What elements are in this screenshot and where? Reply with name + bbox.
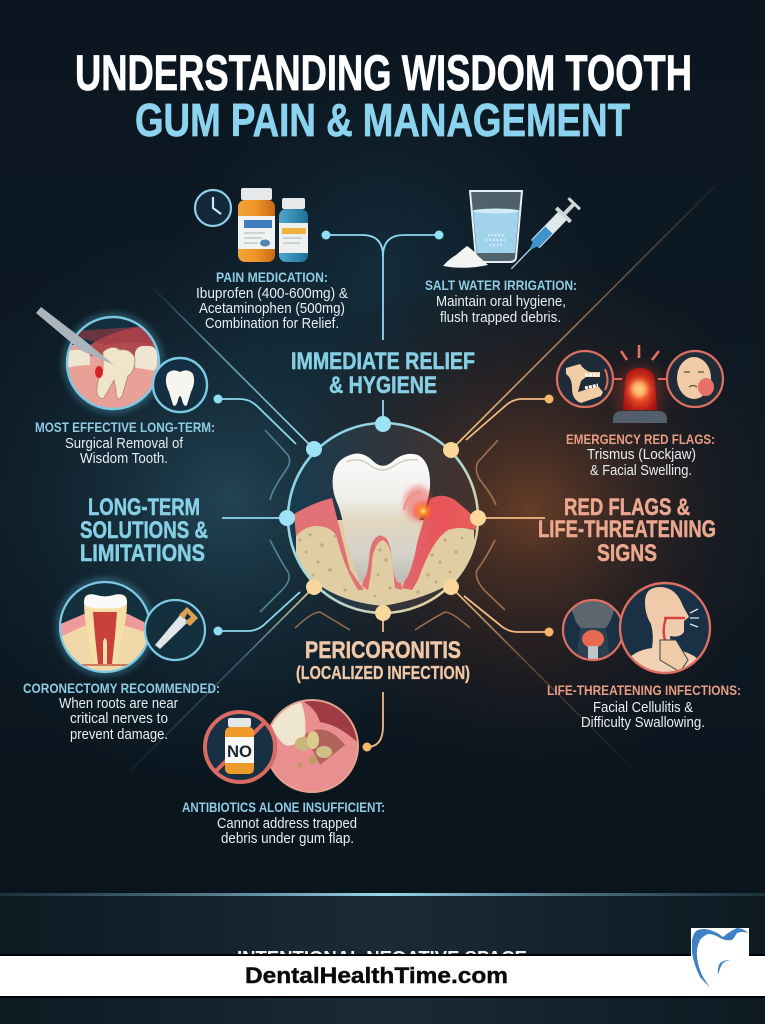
text: pain medication: PAIN MEDICATION: [216,269,328,285]
text: salt water irrigation: flush trapped debris. [440,309,561,326]
tooth [333,453,430,583]
text: coronectomy: prevent damage. [70,726,168,743]
icon: no antibiotics: NO [227,742,252,761]
text: antibiotics: debris under gum flap. [221,830,354,847]
text: coronectomy: CORONECTOMY RECOMMENDED: [23,680,220,696]
title: GUM PAIN & MANAGEMENT [135,94,630,146]
heading: pericoronitis [296,637,470,683]
icon: gum flap debris [266,698,360,792]
text: most effective [35,419,215,467]
connector: long-term middle [222,517,287,519]
connector: red flags lower [464,596,554,636]
heading: pericoronitis: (LOCALIZED INFECTION) [296,663,470,683]
text: coronectomy: When roots are near [59,695,178,712]
connector: immediate relief branches [322,230,444,424]
icon: salt water glass [470,191,522,262]
text: emergency red flags [566,431,715,479]
heading: pericoronitis: PERICORONITIS [305,637,461,664]
heading: long-term solutions: LONG-TERM [88,494,200,521]
clipped footer text: INTENTIONAL NEGATIVE SPACE [237,948,527,968]
title [75,45,692,146]
text: life-threatening infections: Facial Cellulitis & [593,699,693,716]
icon: no antibiotics [203,710,277,784]
connector: red flags middle [478,517,545,519]
website banner [0,954,765,998]
text: most effective: MOST EFFECTIVE LONG-TERM: [35,419,215,435]
icon: logo [691,928,749,987]
heading: long-term solutions [80,494,208,567]
icon: syringe [504,196,582,276]
text: antibiotics: ANTIBIOTICS ALONE INSUFFICIENT: [182,799,385,815]
icon: white tooth circle [153,358,207,412]
text: emergency red flags: EMERGENCY RED FLAGS: [566,431,715,447]
text: salt water irrigation: SALT WATER IRRIGATION: [425,277,577,293]
gums and bone [294,496,476,606]
connector: long-term lower [214,592,300,636]
heading: red flags: SIGNS [597,540,657,567]
text: life-threatening infections: Difficulty Swallowing. [581,714,705,731]
text: salt water irrigation: Maintain oral hygiene, [436,293,566,310]
diagonal connector lines [130,171,730,776]
heading: red flags [538,494,716,567]
text: most effective: Wisdom Tooth. [80,450,168,467]
text: emergency red flags: & Facial Swelling. [590,462,692,479]
text: pain medication [196,269,348,332]
connector: red flags upper [466,394,554,440]
website banner: DentalHealthTime.com [245,963,508,988]
heading: long-term solutions: LIMITATIONS [80,540,205,567]
heading: long-term solutions: SOLUTIONS & [80,517,208,544]
central tooth illustration [288,423,478,613]
icon: red siren [613,345,667,423]
text: life-threatening infections [547,682,741,731]
icon: coronectomy tooth [55,577,155,680]
text: coronectomy: critical nerves to [70,710,168,727]
heading: immediate relief: & HYGIENE [329,372,437,399]
icon: saw [145,600,205,660]
heading: red flags: LIFE-THREATENING [538,516,716,543]
text: coronectomy [23,680,220,743]
icon: jaw trismus [557,351,613,407]
text: most effective: Surgical Removal of [65,435,184,452]
text: antibiotics: Cannot address trapped [217,815,357,832]
icon: salt pile [443,246,488,268]
decorative arcs around the hub [260,430,505,630]
heading: immediate relief: IMMEDIATE RELIEF [291,348,475,375]
icon: head difficulty swallowing [620,583,712,680]
text: pain medication: Ibuprofen (400-600mg) & [196,285,348,302]
icon: swollen face [667,351,723,407]
text: pain medication: Combination for Relief. [205,315,339,332]
footer band [0,893,765,1024]
icon: clock [195,190,231,226]
icon: surgical removal [36,307,170,414]
icon: throat [563,600,623,662]
icon: orange pill bottle [238,188,275,262]
text: pain medication: Acetaminophen (500mg) [199,300,345,317]
connector: long-term upper [214,394,296,444]
text: salt water irrigation [425,277,577,326]
text: antibiotics [182,799,385,847]
inflammation glow [404,486,432,520]
heading: red flags: RED FLAGS & [564,494,690,521]
ring nodes [279,416,486,621]
connector: pericoronitis [362,613,383,752]
text: emergency red flags: Trismus (Lockjaw) [587,446,696,463]
icon: blue pill bottle [279,198,308,262]
heading: immediate relief [291,348,475,399]
